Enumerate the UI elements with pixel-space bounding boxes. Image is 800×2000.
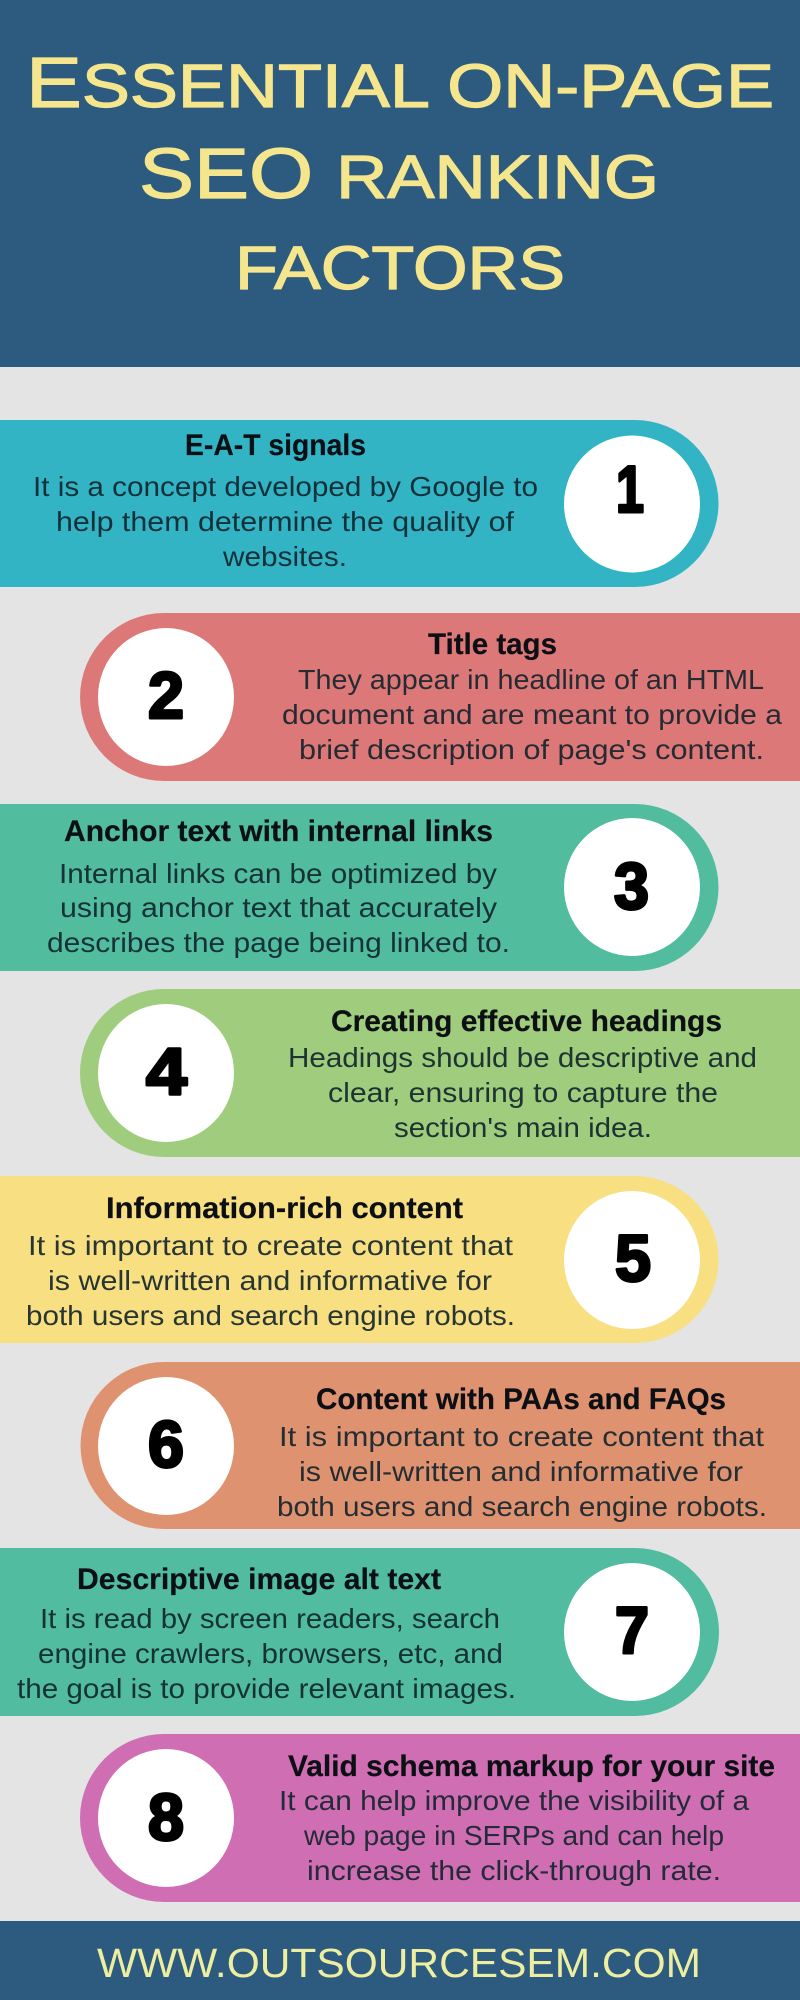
- heading: Descriptive image alt text: [77, 1563, 441, 1596]
- title: [26, 44, 774, 302]
- description: [17, 1603, 516, 1704]
- number badge 3: [564, 818, 700, 956]
- number badge 1: [564, 436, 700, 572]
- heading: Anchor text with internal links: [64, 815, 493, 848]
- description: describes the page being linked to.: [47, 927, 510, 958]
- description: [33, 471, 538, 572]
- panel: 1 E-A-T signals: [0, 420, 718, 587]
- description: document and are meant to provide a: [282, 699, 782, 730]
- panel: 5 Information-rich content: [0, 1176, 718, 1343]
- number badge 8: [98, 1749, 234, 1887]
- footer banner with website: [0, 1921, 800, 2000]
- description: both users and search engine robots.: [26, 1300, 515, 1331]
- description: both users and search engine robots.: [277, 1491, 767, 1522]
- description: Headings should be descriptive and: [288, 1042, 757, 1073]
- description: [279, 1785, 749, 1886]
- panel: 4 Creating effective headings: [80, 989, 800, 1157]
- heading: E-A-T signals: [185, 429, 366, 462]
- number badge 1: 1: [616, 452, 644, 526]
- description: brief description of page's content.: [299, 734, 764, 765]
- website url: WWW.OUTSOURCESEM.COM: [97, 1940, 701, 1986]
- heading: Content with PAAs and FAQs: [316, 1383, 726, 1416]
- panel: 3 Anchor text with internal links: [0, 804, 718, 971]
- heading: Creating effective headings: [331, 1005, 722, 1038]
- panel: 8 Valid schema markup for your site: [80, 1734, 800, 1902]
- heading: Title tags: [428, 628, 557, 661]
- title: ESSENTIAL ON-PAGE: [26, 44, 774, 123]
- description: It is read by screen readers, search: [40, 1603, 500, 1634]
- description: It can help improve the visibility of a: [279, 1785, 749, 1816]
- description: web page in SERPs and can help: [303, 1820, 724, 1851]
- description: [47, 858, 510, 958]
- number badge 3: 3: [614, 849, 649, 923]
- number badge 2: [98, 628, 234, 766]
- description: section's main idea.: [394, 1112, 652, 1143]
- number badge 7: [564, 1563, 700, 1701]
- number badge 6: 6: [148, 1407, 184, 1481]
- number badge 7: 7: [615, 1593, 649, 1667]
- panel: 6 Content with PAAs and FAQs: [81, 1362, 800, 1529]
- description: the goal is to provide relevant images.: [17, 1673, 516, 1704]
- number badge 5: [564, 1191, 700, 1329]
- description: [277, 1421, 767, 1522]
- description: websites.: [222, 541, 347, 572]
- description: [282, 664, 782, 765]
- description: It is important to create content that: [279, 1421, 764, 1452]
- description: increase the click-through rate.: [307, 1855, 721, 1886]
- description: It is a concept developed by Google to: [33, 471, 538, 502]
- panel: 7 Descriptive image alt text: [0, 1548, 719, 1716]
- number badge 4: 4: [146, 1034, 187, 1108]
- heading: Information-rich content: [106, 1192, 463, 1225]
- panel: 2 Title tags: [80, 613, 800, 781]
- description: [26, 1230, 515, 1331]
- description: clear, ensuring to capture the: [328, 1077, 718, 1108]
- header banner with title: [0, 0, 800, 367]
- description: is well-written and informative for: [48, 1265, 492, 1296]
- number badge 8: 8: [148, 1780, 184, 1854]
- number badge 4: [98, 1004, 234, 1142]
- number badge 5: 5: [615, 1221, 651, 1295]
- description: Internal links can be optimized by: [59, 858, 497, 889]
- title: SEO RANKING: [139, 135, 659, 214]
- description: help them determine the quality of: [56, 506, 514, 537]
- number badge 2: 2: [148, 658, 184, 732]
- heading: Valid schema markup for your site: [288, 1750, 775, 1783]
- description: using anchor text that accurately: [60, 892, 497, 923]
- number badge 6: [98, 1377, 234, 1515]
- title: FACTORS: [235, 234, 565, 302]
- description: They appear in headline of an HTML: [298, 664, 764, 695]
- description: engine crawlers, browsers, etc, and: [38, 1638, 503, 1669]
- description: It is important to create content that: [28, 1230, 513, 1261]
- description: is well-written and informative for: [299, 1456, 743, 1487]
- description: [288, 1042, 757, 1143]
